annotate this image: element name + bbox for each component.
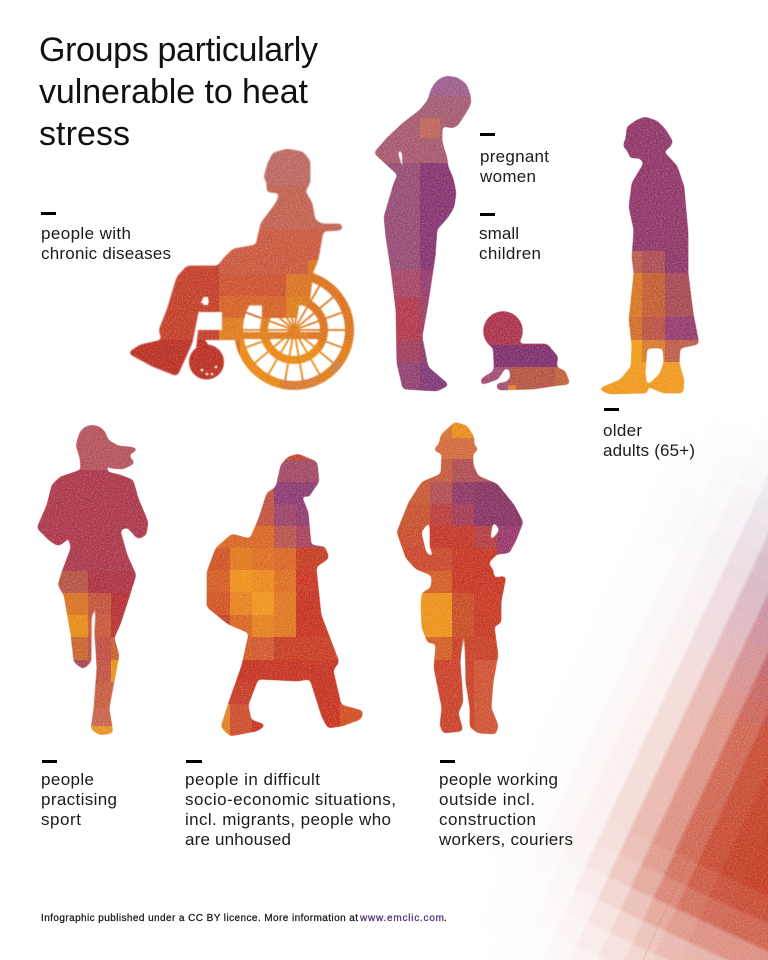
figure: runner (37, 424, 148, 736)
label: people working outside: workers, couriers (438, 830, 573, 849)
label: pregnant women: women (479, 167, 536, 186)
label: people working outside (438, 760, 573, 849)
figures with mosaic fill (25, 70, 705, 742)
title: vulnerable to heat (39, 73, 309, 111)
figure: person in wheelchair (129, 148, 355, 391)
label: chronic diseases: people with (41, 224, 131, 243)
footer licence note: Infographic published under a CC BY licence. More information at (41, 913, 358, 924)
label: people practising sport: practising (41, 790, 117, 809)
figure: pregnant woman (374, 76, 472, 392)
figure: construction worker (397, 422, 523, 734)
label: older adults (603, 408, 695, 460)
label: difficult socio-economic situations: people in difficult (185, 770, 320, 789)
label: people practising sport: sport (41, 810, 81, 829)
label: small children (479, 213, 541, 263)
label: small children: children (479, 244, 541, 263)
label: people practising sport (41, 760, 117, 829)
label: difficult socio-economic situations: socio-economic situations, (185, 790, 396, 809)
footer licence note: www.emclic.com (359, 913, 444, 924)
figure: older adult (600, 117, 699, 394)
label: people practising sport: people (41, 770, 94, 789)
label: pregnant women: pregnant (480, 147, 549, 166)
label: chronic diseases (41, 212, 171, 263)
label: pregnant women (479, 133, 549, 186)
label: difficult socio-economic situations: incl. migrants, people who (185, 810, 391, 829)
figure: person with large bundle (206, 454, 363, 736)
label: people working outside: outside incl. (439, 790, 535, 809)
title: Groups particularly (39, 31, 318, 69)
label: people working outside: people working (439, 770, 558, 789)
label: older adults: adults (65+) (603, 441, 695, 460)
label: difficult socio-economic situations: are unhoused (185, 830, 291, 849)
label: small children: small (479, 224, 519, 243)
label: chronic diseases: chronic diseases (41, 244, 171, 263)
title (39, 31, 318, 153)
figure: crawling baby (480, 311, 570, 390)
label: people working outside: construction (439, 810, 536, 829)
label: older adults: older (603, 421, 642, 440)
title: stress (39, 115, 130, 153)
footer licence note: . (444, 913, 447, 924)
label: difficult socio-economic situations (185, 760, 396, 849)
